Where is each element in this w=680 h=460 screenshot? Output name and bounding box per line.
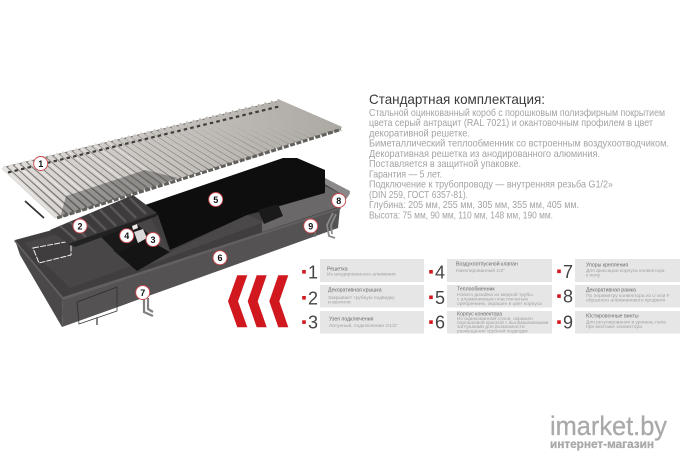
connection pipes and valve (100, 222, 170, 271)
decorative cover (50, 195, 157, 247)
marker 4: 4 (124, 231, 129, 241)
marker 3 (146, 232, 160, 246)
legend item 5: Нового дизайна из медной трубы (457, 291, 533, 298)
aluminium grate (3, 101, 341, 218)
specification text: Гарантия — 5 лет. (369, 170, 442, 180)
legend item 1 (302, 259, 424, 282)
heading: Стандартная комплектация: (369, 92, 545, 107)
legend item 9: 9 (563, 312, 573, 332)
convector product illustration (3, 101, 350, 327)
legend item 2: 2 (308, 288, 318, 308)
legend item 6: порошковой краской с выламываемыми (457, 319, 549, 326)
marker 7 (136, 286, 150, 300)
legend item 8 (557, 285, 680, 308)
marker 5 (209, 192, 223, 206)
legend item 2: Декоративная крышка (328, 288, 382, 294)
marker 4 (120, 229, 134, 243)
specification text: Высота: 75 мм, 90 мм, 110 мм, 148 мм, 190 мм. (369, 210, 553, 222)
marker 6: 6 (217, 253, 223, 263)
legend item 3 (302, 311, 424, 334)
mounting bracket near 7 (144, 298, 153, 316)
specification text: Поставляется в защитной упаковке. (369, 159, 521, 170)
legend item 9: Для регулирования в уровень пола (586, 320, 666, 326)
adjustment screw rear (314, 232, 316, 237)
legend item 9: Юстировочные винты (586, 314, 639, 320)
legend item 4: Воздухоотпускной клапан (456, 260, 518, 268)
legend item 1: Решетка (327, 266, 348, 272)
marker 8 (332, 194, 346, 208)
specification text: Подключение к трубопроводу — внутренняя резьба G1/2» (369, 179, 613, 191)
specification text: Декоративная решетка из анодированного алюминия. (369, 149, 600, 160)
specification text: декоративной решетке. (369, 128, 470, 140)
marker 9 (304, 219, 318, 233)
legend item 7 (557, 259, 680, 282)
watermark logo: интернет-магазин (550, 439, 654, 451)
red chevrons (228, 275, 288, 327)
legend item 3: Узел подключения (329, 316, 374, 322)
legend item 8: 8 (563, 286, 573, 306)
marker 8: 8 (336, 196, 341, 206)
specification text: (DIN 259, ГОСТ 6357-81). (369, 190, 468, 201)
legend item 9 (557, 311, 680, 334)
mounting bracket near 8 (327, 213, 336, 238)
legend item 3: 3 (308, 312, 318, 332)
front wall cut-out (77, 287, 117, 324)
legend item 1: Из анодированного алюминия (327, 272, 396, 278)
grate rail (25, 201, 44, 218)
legend item 8: образного алюминиевого профиля (586, 298, 665, 304)
marker 5: 5 (213, 195, 218, 205)
legend item 9: при монтаже конвектора (586, 325, 642, 330)
legend item 6 (429, 311, 552, 334)
legend item 7: 7 (563, 262, 573, 282)
legend item 2 (302, 285, 424, 308)
marker 1 (34, 156, 48, 170)
marker 2 (73, 219, 87, 233)
marker 2: 2 (77, 221, 83, 231)
legend item 8: По периметру конвектора из U или F (586, 293, 670, 299)
legend item 6: 6 (435, 312, 445, 332)
adjustment screw front (96, 317, 98, 325)
legend item 5: Теплообменник (457, 286, 495, 292)
legend item 2: Закрывает трубную подводку (328, 295, 395, 301)
legend item 6: Из оцинкованной стали, окрашен (457, 315, 533, 322)
convector housing (14, 178, 350, 327)
marker 3: 3 (150, 235, 156, 245)
legend item 3: Латунный, подключение G1/2" (329, 322, 398, 329)
legend item 6: Корпус конвектора (457, 312, 502, 318)
legend item 4 (429, 259, 552, 282)
marker 1: 1 (38, 159, 43, 169)
marker 9: 9 (308, 221, 313, 231)
legend item 5: с алюминиевым пластинчатым (457, 298, 528, 302)
legend item 5 (429, 285, 552, 308)
legend item 8: Декоративная рамка (586, 288, 636, 294)
legend item 2: и вентили (328, 300, 351, 306)
marker 6 (213, 251, 227, 265)
legend item 4: 4 (435, 262, 445, 282)
left service hatch (33, 241, 71, 263)
legend item 5: 5 (435, 288, 445, 308)
marker 7: 7 (140, 288, 145, 298)
legend item 1: 1 (308, 262, 318, 282)
legend item 7: к полу (586, 274, 601, 278)
legend item 6: размещения трубной подводки (457, 328, 528, 334)
watermark logo: imarket.by (550, 411, 667, 441)
specification text (369, 107, 669, 222)
legend item 4: Никелированный 1/2" (456, 267, 505, 274)
heat exchanger block (258, 204, 283, 224)
legend item 5: оребрением, окрашен в цвет корпуса (457, 301, 542, 307)
legend item 7: Для фиксации корпуса конвектора (586, 268, 665, 274)
legend item 6: заглушками для возможности (457, 325, 525, 330)
specification text: Глубина: 205 мм, 255 мм, 305 мм, 355 мм, 405 мм. (369, 199, 579, 211)
legend item 7: Упоры крепления (586, 262, 628, 268)
heat exchanger (145, 158, 325, 250)
